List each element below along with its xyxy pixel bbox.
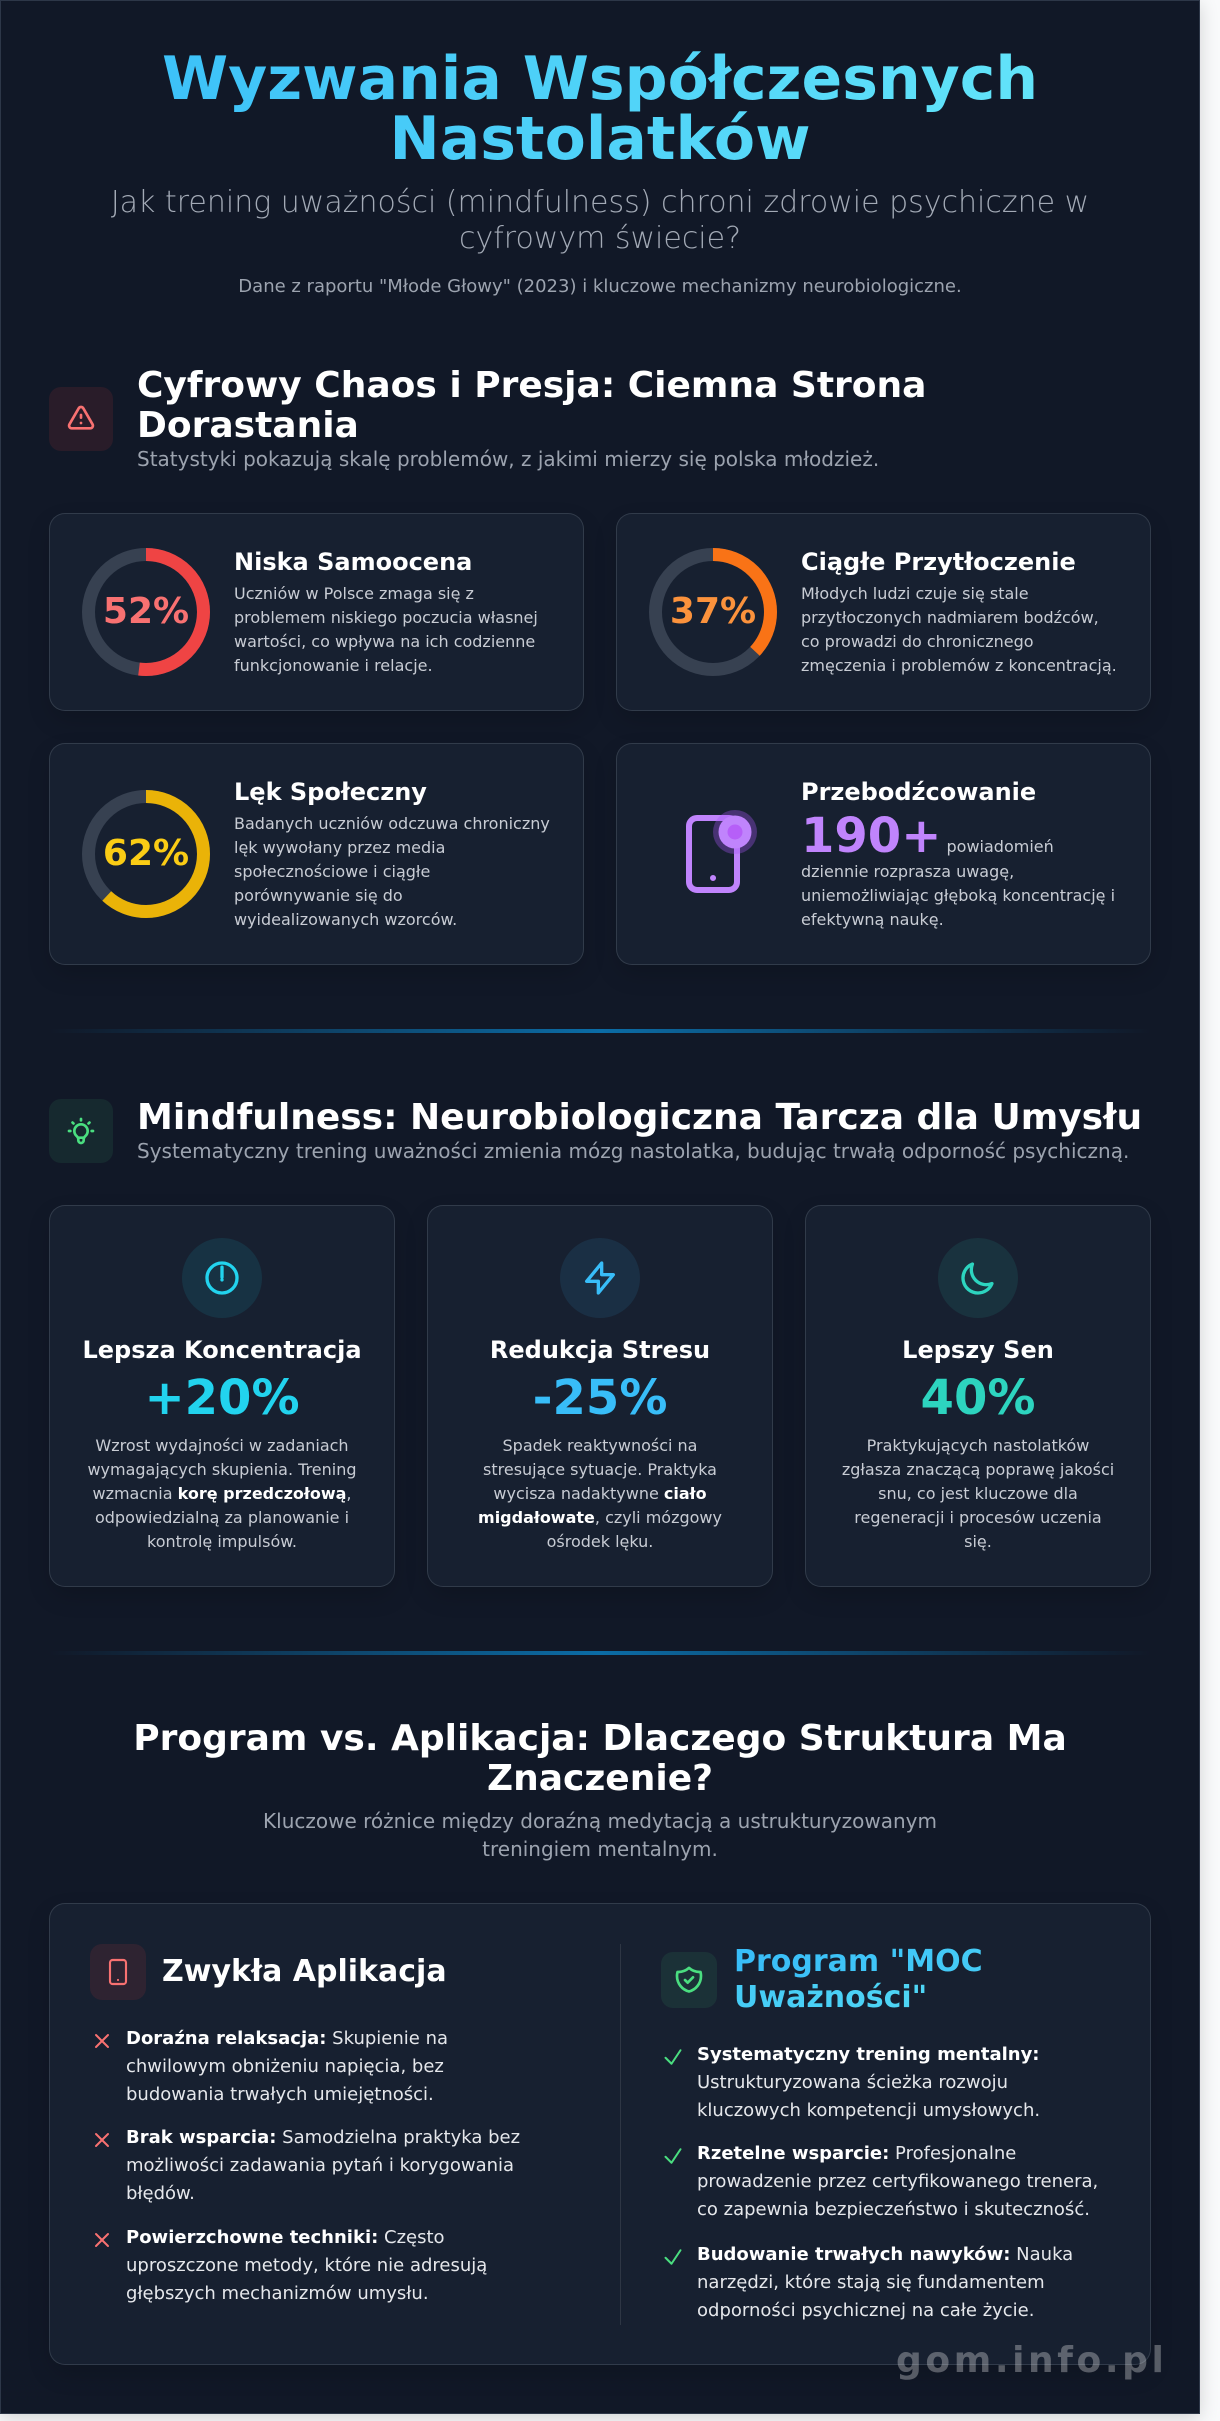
card text: regeneracji i procesów uczenia xyxy=(854,1508,1102,1527)
card text: snu, co jest kluczowe dla xyxy=(878,1484,1078,1503)
card text: Wzrost wydajności w zadaniach xyxy=(95,1436,349,1455)
card text xyxy=(801,584,1117,675)
heading text: Znaczenie? xyxy=(487,1758,713,1799)
card text with 190+ stat: efektywną naukę. xyxy=(801,910,944,929)
stat: -25% xyxy=(533,1370,667,1426)
watermark: gom.info.pl xyxy=(896,2340,1167,2381)
card heading: Lepsza Koncentracja xyxy=(82,1336,362,1364)
title xyxy=(49,49,1151,169)
stat: 40% xyxy=(921,1370,1035,1426)
card text: lęk wywołany przez media xyxy=(234,838,445,857)
panel: ciągłe przytłoczenie xyxy=(616,513,1151,711)
heading text: Cyfrowy Chaos i Presja: Ciemna Strona xyxy=(137,365,926,406)
heading description: Statystyki pokazują skalę problemów, z jakimi mierzy się polska młodzież. xyxy=(137,447,879,471)
title: Nastolatków xyxy=(390,104,810,174)
icon: light bulb xyxy=(49,1099,113,1163)
card text: przytłoczonych nadmiarem bodźców, xyxy=(801,608,1099,627)
card text: funkcjonowanie i relacje. xyxy=(234,656,433,675)
card text with 190+ stat: uniemożliwiając głęboką koncentrację i xyxy=(801,886,1115,905)
panel: redukcja stresu xyxy=(427,1205,773,1587)
list item: rzetelne wsparcie: Rzetelne wsparcie: Profesjonalne xyxy=(697,2143,1016,2164)
column: zwykła aplikacja xyxy=(90,1944,520,2304)
list item: rzetelne wsparcie: prowadzenie przez certyfikowanego trenera, xyxy=(697,2171,1098,2192)
card heading: Ciągłe Przytłoczenie xyxy=(801,548,1076,576)
list item: systematyczny trening: Systematyczny trening mentalny: xyxy=(697,2044,1040,2065)
icon: phone with notification xyxy=(686,810,757,893)
heading text xyxy=(133,1718,1067,1799)
list item: rzetelne wsparcie: co zapewnia bezpieczeństwo i skuteczność. xyxy=(697,2199,1090,2220)
panel: lepszy sen xyxy=(805,1205,1151,1587)
list item: rzetelne wsparcie xyxy=(664,2143,1098,2220)
icon: warning triangle xyxy=(49,387,113,451)
heading description: Kluczowe różnice między doraźną medytacją a ustrukturyzowanym xyxy=(263,1809,937,1833)
list item: powierzchowne techniki xyxy=(95,2227,487,2304)
list item: systematyczny trening xyxy=(664,2044,1040,2121)
heading description xyxy=(263,1809,937,1861)
card text: Praktykujących nastolatków xyxy=(867,1436,1089,1455)
panel: lepsza koncentracja xyxy=(49,1205,395,1587)
card text xyxy=(842,1436,1114,1551)
list item: budowanie nawyków: Budowanie trwałych nawyków: Nauka xyxy=(697,2244,1073,2265)
icon: focus circle xyxy=(182,1238,262,1318)
card heading: Redukcja Stresu xyxy=(490,1336,710,1364)
list item: doraźna relaksacja: chwilowym obniżeniu napięcia, bez xyxy=(126,2056,444,2077)
subtitle: Jak trening uważności (mindfulness) chroni zdrowie psychiczne w xyxy=(111,185,1089,220)
list item: powierzchowne techniki: Powierzchowne techniki: Często xyxy=(126,2227,445,2248)
panel: przebodźcowanie xyxy=(616,743,1151,965)
card text xyxy=(87,1436,357,1551)
donut chart: 62%: 62% xyxy=(103,833,189,874)
section heading: cyfrowy chaos xyxy=(49,365,926,471)
list item: systematyczny trening: Ustrukturyzowana ścieżka rozwoju xyxy=(697,2072,1008,2093)
card text: problemem niskiego poczucia własnej xyxy=(234,608,538,627)
list item: budowanie nawyków: narzędzi, które stają się fundamentem xyxy=(697,2272,1045,2293)
card text: wartości, co wpływa na ich codzienne xyxy=(234,632,535,651)
card text with 190+ stat xyxy=(801,808,1115,929)
panel: comparison xyxy=(49,1903,1151,2365)
donut chart: 37%: 37% xyxy=(670,591,756,632)
column heading: Program "MOC xyxy=(734,1944,983,1979)
card heading: Lęk Społeczny xyxy=(234,778,427,806)
card text: wycisza nadaktywne ciało xyxy=(493,1484,707,1503)
column: program moc uważności xyxy=(661,1944,1098,2321)
title: Wyzwania Współczesnych xyxy=(162,44,1038,114)
card text with 190+ stat: 190+ powiadomień xyxy=(801,808,1054,864)
card text: stresujące sytuacje. Praktyka xyxy=(483,1460,717,1479)
list item: budowanie nawyków: odporności psychicznej na całe życie. xyxy=(697,2300,1034,2321)
source note: Dane z raportu "Młode Głowy" (2023) i kluczowe mechanizmy neurobiologiczne. xyxy=(238,276,962,297)
icon: phone xyxy=(90,1944,146,2000)
heading text xyxy=(137,365,926,446)
subtitle xyxy=(111,185,1089,256)
list item: brak wsparcia: błędów. xyxy=(126,2183,195,2204)
section heading: program vs aplikacja xyxy=(133,1718,1067,1861)
heading description: treningiem mentalnym. xyxy=(482,1837,718,1861)
card text: porównywanie się do xyxy=(234,886,403,905)
card text: Młodych ludzi czuje się stale xyxy=(801,584,1029,603)
donut chart: 62% xyxy=(82,790,210,918)
list item: brak wsparcia: Brak wsparcia: Samodzielna praktyka bez xyxy=(126,2127,520,2148)
list item: doraźna relaksacja xyxy=(95,2028,448,2105)
card text: się. xyxy=(964,1532,992,1551)
list item: doraźna relaksacja: budowania trwałych umiejętności. xyxy=(126,2084,434,2105)
card text: wzmacnia korę przedczołową, xyxy=(92,1484,352,1503)
icon: shield check xyxy=(661,1952,717,2008)
column heading xyxy=(734,1944,983,2015)
column heading: Zwykła Aplikacja xyxy=(162,1954,447,1989)
card text: społecznościowe i ciągłe xyxy=(234,862,430,881)
icon: moon xyxy=(938,1238,1018,1318)
card text: zmęczenia i problemów z koncentracją. xyxy=(801,656,1117,675)
card text xyxy=(234,814,550,929)
card text: zgłasza znaczącą poprawę jakości xyxy=(842,1460,1114,1479)
list item: brak wsparcia: możliwości zadawania pytań i korygowania xyxy=(126,2155,514,2176)
heading text: Mindfulness: Neurobiologiczna Tarcza dla Umysłu xyxy=(137,1097,1142,1138)
list item: doraźna relaksacja: Doraźna relaksacja: Skupienie na xyxy=(126,2028,448,2049)
card heading: Niska Samoocena xyxy=(234,548,472,576)
heading description: Systematyczny trening uważności zmienia mózg nastolatka, budując trwałą odporność psychiczną. xyxy=(137,1139,1129,1163)
card text: wyidealizowanych wzorców. xyxy=(234,910,457,929)
card text xyxy=(234,584,538,675)
heading text: Dorastania xyxy=(137,405,359,446)
stat: +20% xyxy=(144,1370,300,1426)
subtitle: cyfrowym świecie? xyxy=(459,221,741,256)
icon: lightning bolt xyxy=(560,1238,640,1318)
card text: migdałowate, czyli mózgowy xyxy=(478,1508,722,1527)
card text: kontrolę impulsów. xyxy=(147,1532,297,1551)
card text: co prowadzi do chronicznego xyxy=(801,632,1034,651)
donut chart: 52% xyxy=(82,548,210,676)
donut chart: 37% xyxy=(649,548,777,676)
card text: Uczniów w Polsce zmaga się z xyxy=(234,584,474,603)
card text: odpowiedzialną za planowanie i xyxy=(95,1508,349,1527)
card text with 190+ stat: dziennie rozprasza uwagę, xyxy=(801,862,1014,881)
card text: ośrodek lęku. xyxy=(547,1532,653,1551)
card heading: Lepszy Sen xyxy=(902,1336,1054,1364)
list item: budowanie nawyków xyxy=(664,2244,1073,2321)
list item: powierzchowne techniki: głębszych mechanizmów umysłu. xyxy=(126,2283,429,2304)
list item: powierzchowne techniki: uproszczone metody, które nie adresują xyxy=(126,2255,487,2276)
card heading: Przebodźcowanie xyxy=(801,778,1036,806)
list item: systematyczny trening: kluczowych kompetencji umysłowych. xyxy=(697,2100,1040,2121)
column heading: Uważności" xyxy=(734,1980,927,2015)
list item: brak wsparcia xyxy=(95,2127,520,2204)
section heading: mindfulness xyxy=(49,1097,1142,1163)
card text xyxy=(478,1436,722,1551)
heading text: Program vs. Aplikacja: Dlaczego Struktura Ma xyxy=(133,1718,1067,1759)
card text: Badanych uczniów odczuwa chroniczny xyxy=(234,814,550,833)
panel: niska samoocena xyxy=(49,513,584,711)
card text: wymagających skupienia. Trening xyxy=(87,1460,357,1479)
panel: lęk społeczny xyxy=(49,743,584,965)
card text: Spadek reaktywności na xyxy=(502,1436,697,1455)
donut chart: 52%: 52% xyxy=(103,591,189,632)
